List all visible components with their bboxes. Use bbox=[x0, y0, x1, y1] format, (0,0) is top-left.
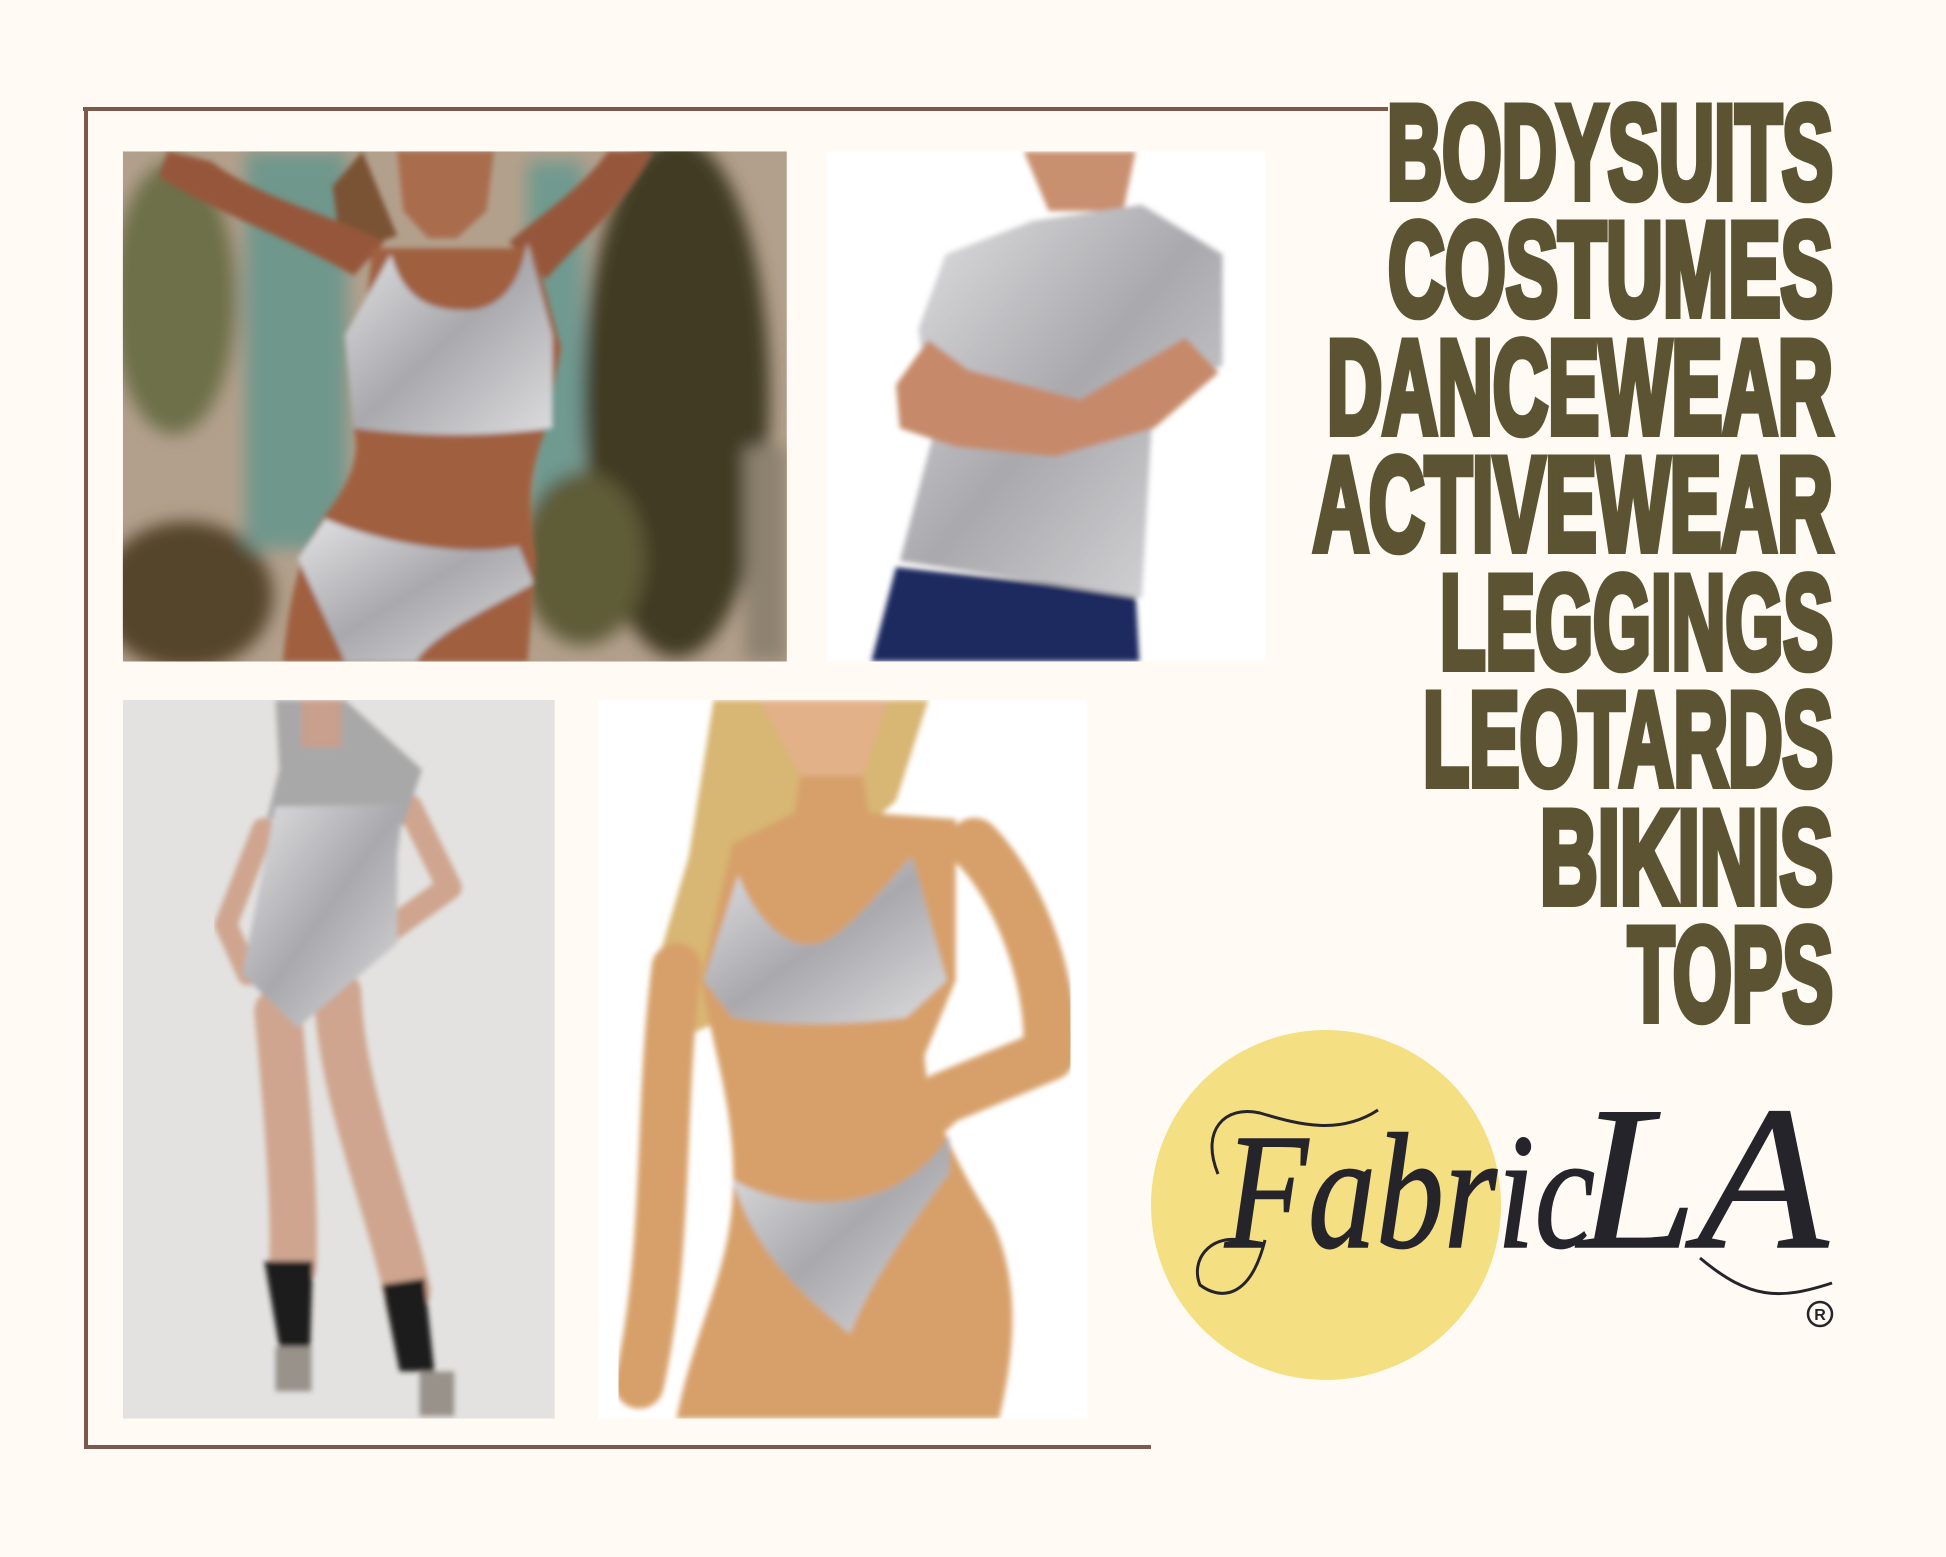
logo: FabricLA bbox=[1151, 1030, 1832, 1380]
product list bbox=[1313, 79, 1833, 1049]
logo circle bbox=[1151, 1030, 1501, 1380]
logo wordmark: LA: LA bbox=[1575, 1065, 1829, 1292]
logo wordmark: Fabric: Fabric bbox=[1224, 1100, 1595, 1283]
photo: silver crop top outdoors bbox=[99, 137, 787, 670]
photo: silver hooded bodysuit bbox=[123, 700, 555, 1419]
photo: silver two-piece with blonde model bbox=[598, 700, 1087, 1419]
infographic canvas bbox=[83, 101, 1836, 1449]
photo: silver t-shirt bbox=[827, 151, 1266, 662]
registered mark bbox=[1808, 1302, 1832, 1326]
logo swashes bbox=[1197, 1110, 1832, 1294]
frame: top, left and bottom rule bbox=[83, 107, 1388, 1449]
registered mark: R bbox=[1814, 1307, 1826, 1324]
